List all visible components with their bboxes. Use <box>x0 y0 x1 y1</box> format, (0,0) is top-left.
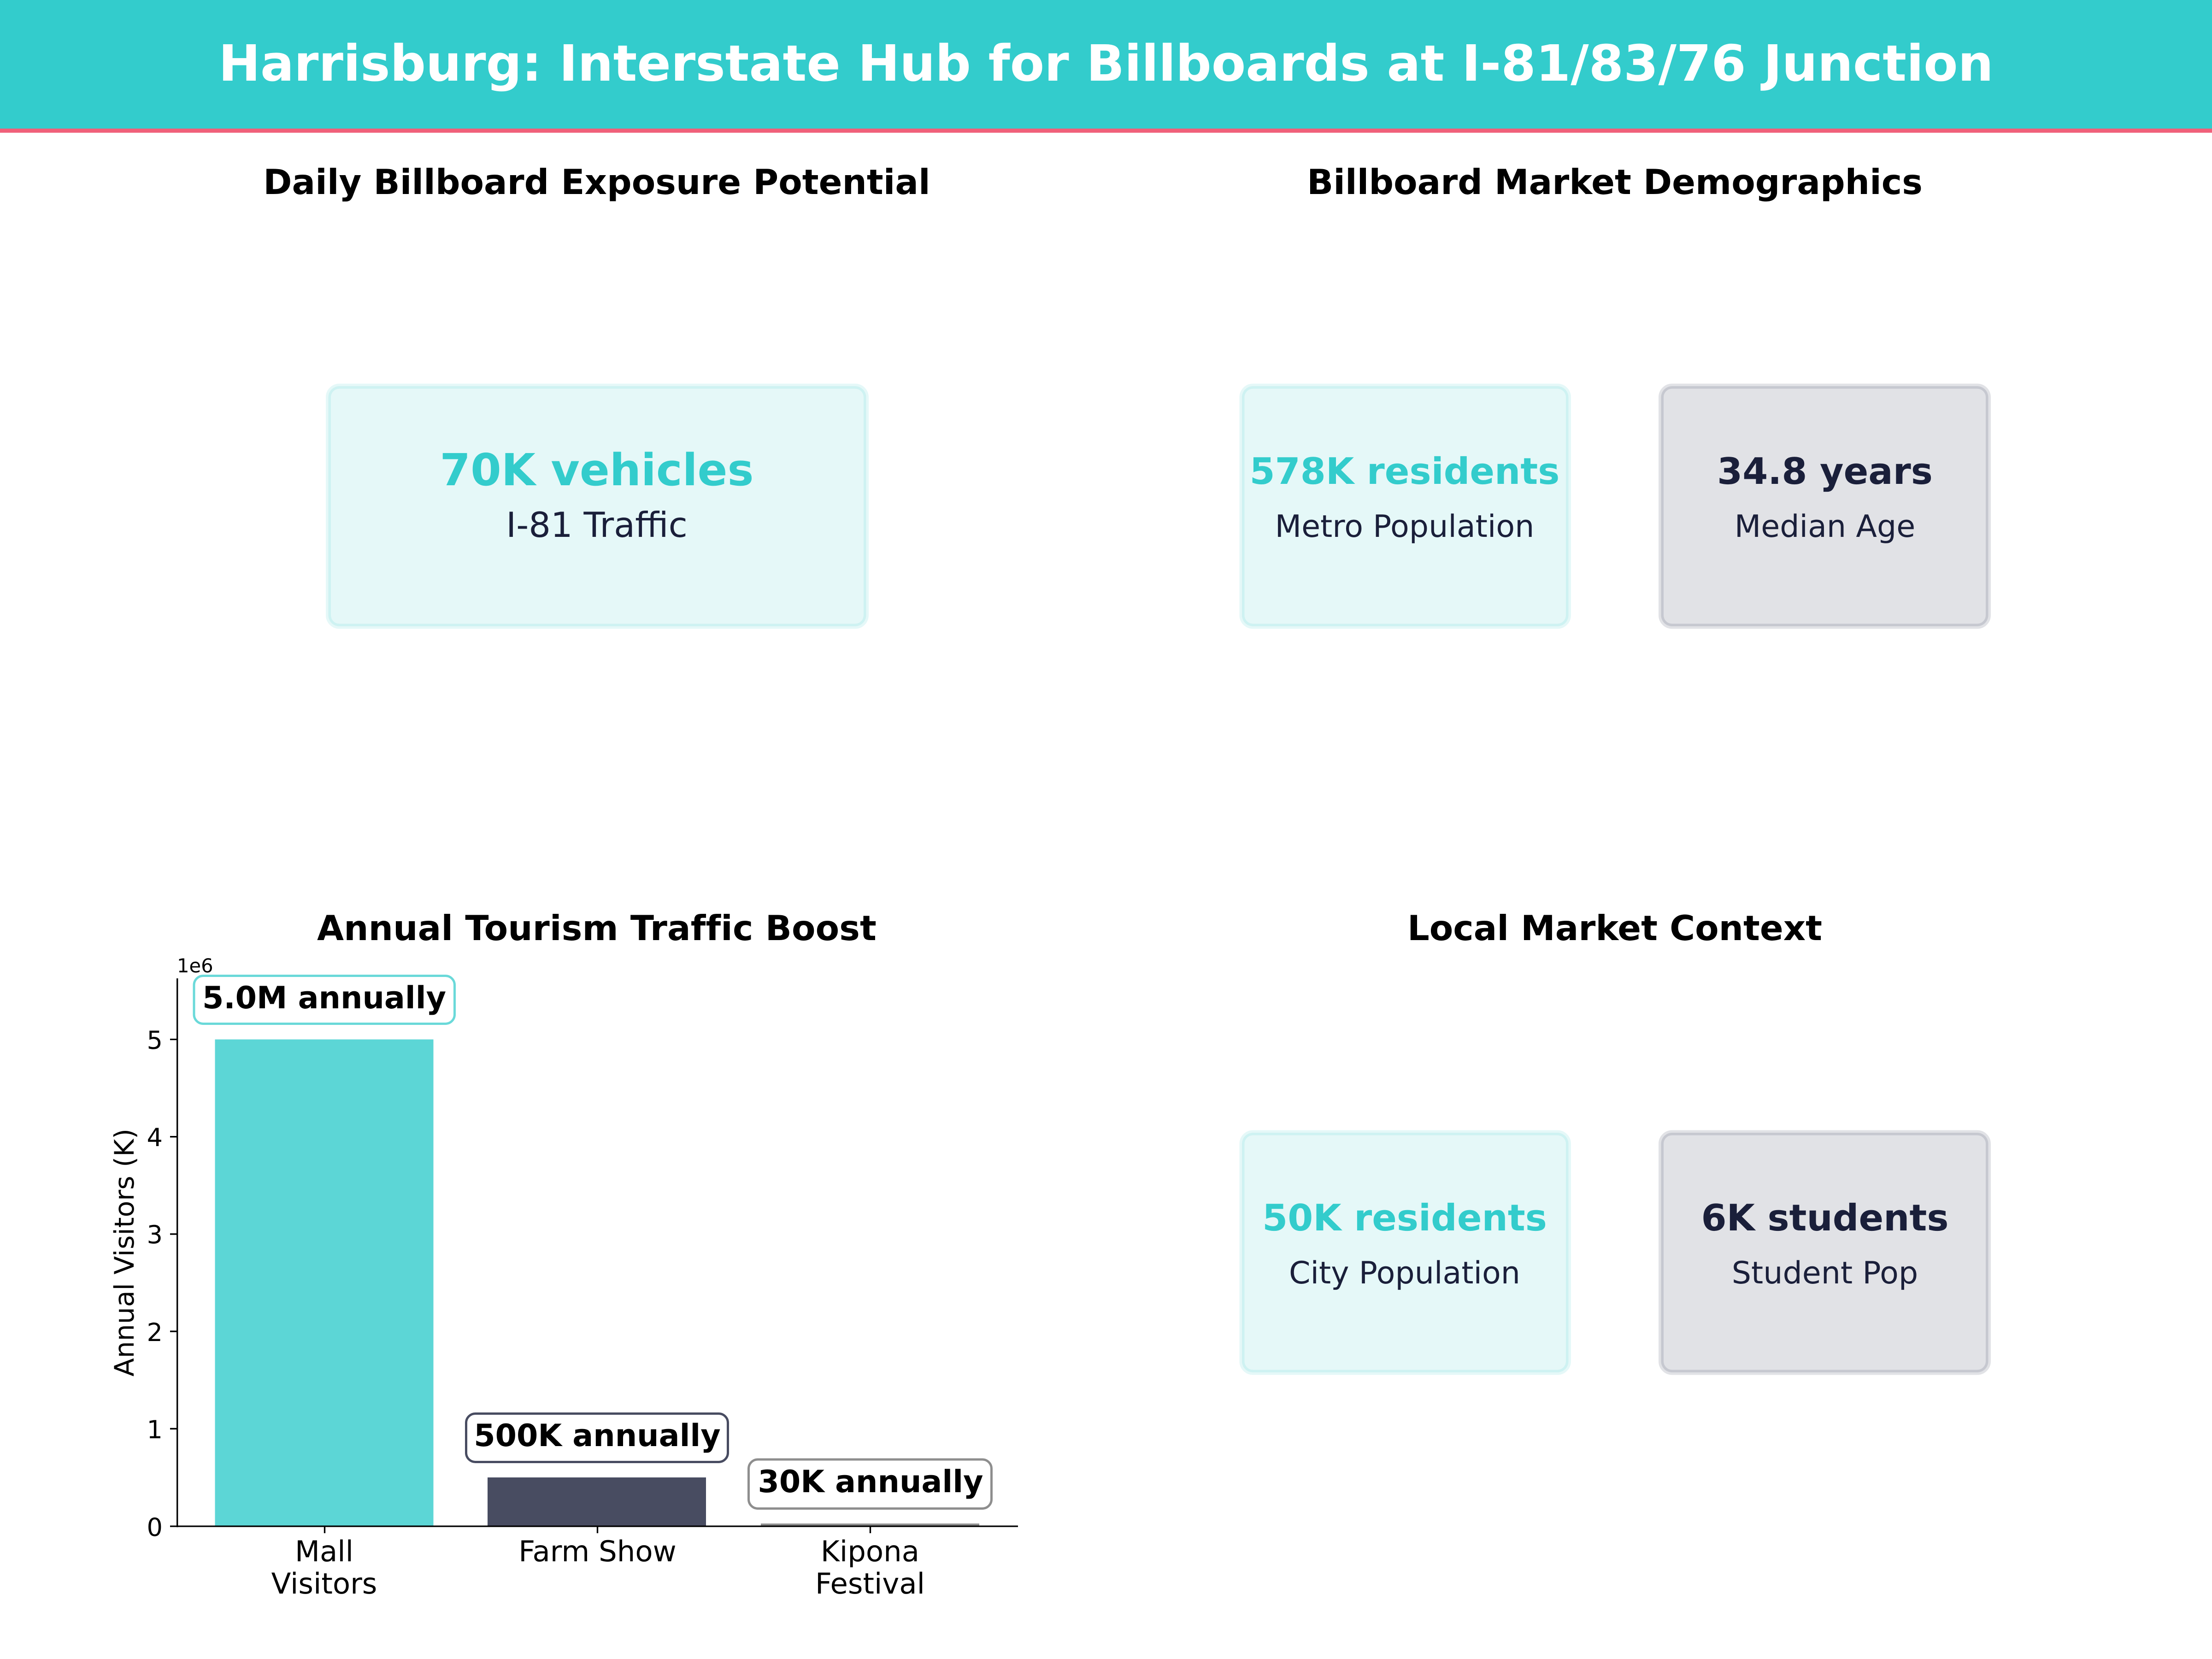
callout: 30K annually: 30K annually <box>758 1464 983 1500</box>
x tick labels: Farm Show <box>518 1535 677 1568</box>
stat card: city population: 50K residents <box>1262 1197 1547 1239</box>
callout: 500K annually: 500K annually <box>474 1418 721 1453</box>
stat card: student population: Student Pop <box>1732 1255 1918 1291</box>
panel: daily billboard exposure <box>263 162 930 626</box>
panel: local market context <box>1242 908 1988 1372</box>
bar: mall visitors <box>215 1040 433 1526</box>
heading: local market: Local Market Context <box>1407 908 1822 948</box>
y tick labels: 4 <box>147 1123 163 1152</box>
axis offset label: 1e6 <box>177 954 213 977</box>
y tick labels: 0 <box>147 1513 163 1542</box>
stat card: I-81 traffic: I-81 Traffic <box>506 505 688 545</box>
stat card: city population <box>1242 1133 1569 1372</box>
heading: demographics: Billboard Market Demographics <box>1307 162 1923 202</box>
panel: annual tourism traffic boost <box>109 908 1018 1600</box>
y tick labels: 1 <box>147 1415 163 1444</box>
y tick labels: 5 <box>147 1026 163 1055</box>
y tick labels: 2 <box>147 1318 163 1347</box>
x axis <box>176 1526 1018 1533</box>
x tick labels: Mall <box>295 1535 353 1568</box>
stat card: median age <box>1661 386 1988 626</box>
x tick labels <box>271 1535 925 1600</box>
callout: 30K annually <box>748 1459 992 1509</box>
stat card: student population: 6K students <box>1701 1197 1948 1239</box>
stat card: student population <box>1661 1133 1988 1372</box>
x tick labels: Festival <box>815 1567 925 1600</box>
panel: billboard market demographics <box>1242 162 1988 626</box>
stat card: I-81 traffic <box>328 386 866 626</box>
bar chart <box>109 954 1018 1600</box>
y tick labels: 3 <box>147 1220 163 1249</box>
stat card: metro population: Metro Population <box>1275 508 1534 544</box>
bar: kipona festival <box>761 1524 979 1526</box>
x tick labels: Visitors <box>271 1567 377 1600</box>
stat card: I-81 traffic: 70K vehicles <box>440 444 754 496</box>
stat card: metro population: 578K residents <box>1250 450 1559 493</box>
stat card: median age: 34.8 years <box>1717 450 1933 493</box>
y axis label: Annual Visitors (K) <box>109 1129 140 1377</box>
heading: exposure: Daily Billboard Exposure Potential <box>263 162 930 202</box>
title banner <box>0 0 2212 133</box>
stat card: metro population <box>1242 386 1569 626</box>
y tick labels <box>147 1026 163 1542</box>
stat card: median age: Median Age <box>1735 508 1915 544</box>
bar: farm show <box>488 1477 706 1526</box>
title: Harrisburg: Interstate Hub for Billboards at I-81/83/76 Junction <box>218 34 1994 93</box>
callout: 5.0M annually: 5.0M annually <box>202 980 446 1016</box>
heading: tourism: Annual Tourism Traffic Boost <box>317 908 877 948</box>
stat card: city population: City Population <box>1289 1255 1520 1291</box>
x tick labels: Kipona <box>821 1535 919 1568</box>
y axis <box>170 978 177 1527</box>
